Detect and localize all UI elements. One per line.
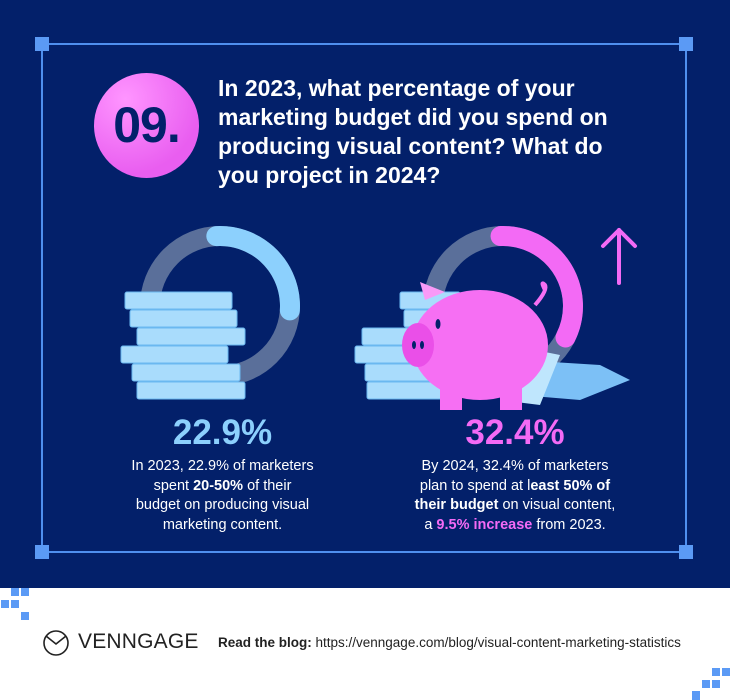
stat: 32.4%: their budget on visual content, (415, 497, 615, 513)
footer logo: Venngage (43, 630, 199, 656)
stat: 22.9% (131, 413, 314, 532)
badge: 09: 09. (113, 97, 180, 153)
stat: 22.9%: marketing content. (163, 516, 282, 532)
stat: 22.9%: budget on producing visual (136, 497, 309, 513)
footer blog link: Read the blog: https://venngage.com/blog/visual-content-marketing-statistics (218, 635, 681, 650)
stat: 32.4%: plan to spend at least 50% of (420, 478, 610, 494)
stat: 22.9%: spent 20-50% of their (154, 478, 291, 494)
footer logo: Venngage: VENNGAGE (78, 630, 199, 653)
stat: 32.4% (414, 413, 615, 532)
stat: 32.4%: By 2024, 32.4% of marketers (422, 458, 608, 474)
title: In 2023, what percentage of your marketing budget did you spend on producing visual content? What do you project in 2024? (218, 75, 608, 188)
stat: 32.4%: 32.4% (465, 413, 565, 452)
stat: 22.9%: In 2023, 22.9% of marketers (131, 458, 314, 474)
badge: 09 (94, 73, 199, 178)
stat: 32.4%: a 9.5% increase from 2023. (424, 516, 606, 532)
stat: 22.9%: 22.9% (173, 413, 272, 452)
